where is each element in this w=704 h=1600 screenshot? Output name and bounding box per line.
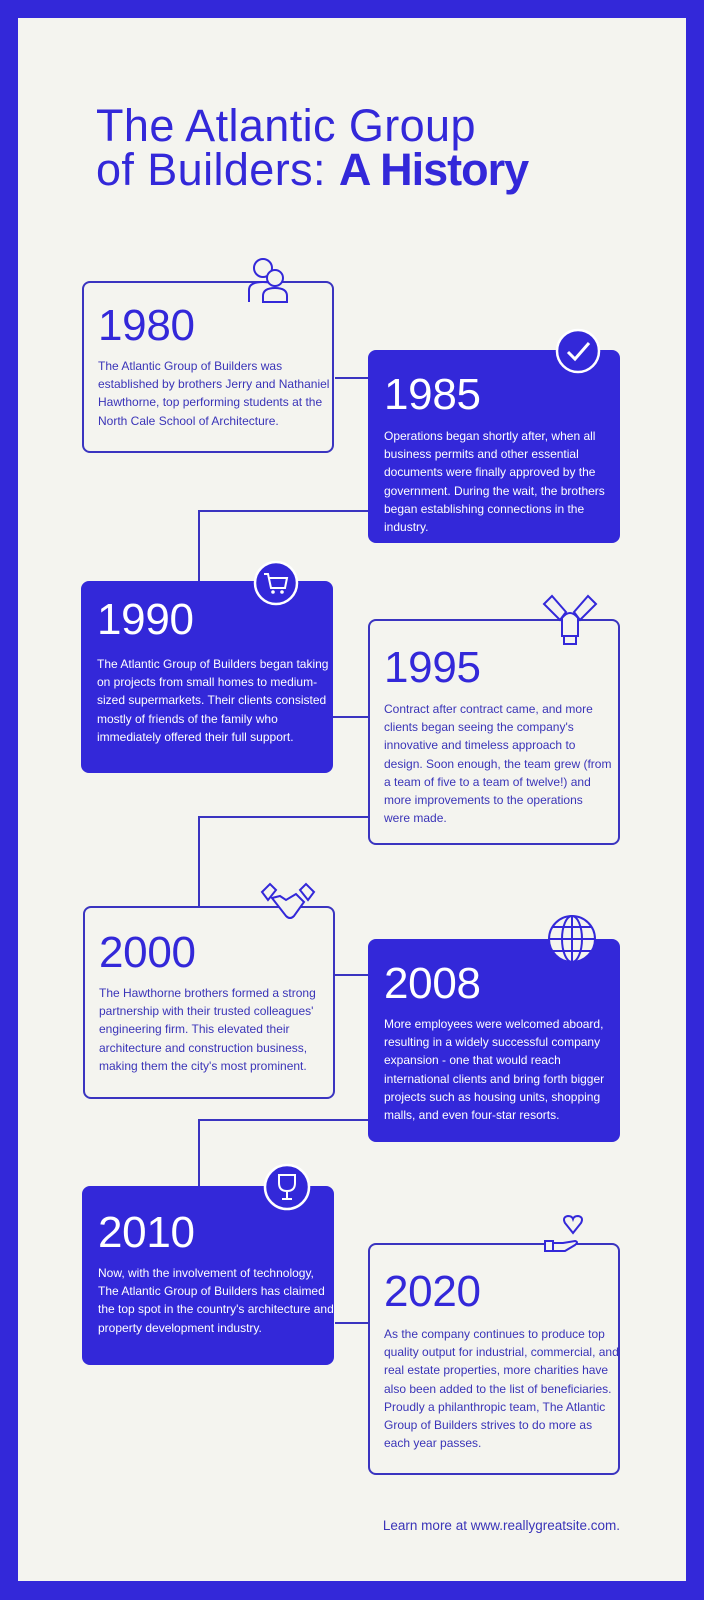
title (96, 100, 529, 195)
card 1985: Operations began shortly after, when all business permits and other essential documents were finally approved by the government. During the wait, the brothers began establishing connections in the industry. (384, 429, 605, 534)
icon: hands (542, 594, 598, 645)
title: of Builders: A History (96, 144, 528, 195)
card 1980 (82, 281, 334, 453)
card 1985: 1985 (384, 370, 481, 419)
card 1980: 1980 (98, 301, 195, 350)
card 2020: 2020 (384, 1267, 481, 1316)
card 2000: 2000 (99, 928, 196, 977)
card 2000: The Hawthorne brothers formed a strong partnership with their trusted colleagues' engineering firm. This elevated their architecture and construction business, making them the city's most prominent. (99, 986, 316, 1073)
card 1995 (368, 619, 620, 845)
card 2000 (83, 906, 335, 1099)
icon: trophy (264, 1164, 310, 1210)
card 1990: The Atlantic Group of Builders began taking on projects from small homes to medium-sized supermarkets. Their clients consisted mostly of friends of the family who immediately offered their full support. (97, 657, 328, 744)
title: The Atlantic Group (96, 100, 476, 151)
icon: check (556, 329, 600, 374)
icon: handshake (260, 882, 316, 919)
card 2008 (368, 939, 620, 1142)
card 2010: Now, with the involvement of technology, The Atlantic Group of Builders has claimed the top spot in the country's architecture and property development industry. (98, 1266, 334, 1335)
icon: heart in hand (544, 1215, 583, 1252)
card 2020: As the company continues to produce top quality output for industrial, commercial, and real estate properties, more charities have also been added to the list of beneficiaries. Proudly a philanthropic team, The Atlantic Group of Builders strives to do more as each year passes. (384, 1327, 619, 1450)
icon: cart (254, 561, 298, 606)
card 1990 (81, 581, 333, 773)
card 1985 (368, 350, 620, 543)
card 1980: The Atlantic Group of Builders was established by brothers Jerry and Nathaniel Hawthorne, top performing students at the North Cale School of Architecture. (98, 359, 329, 428)
card 2020 (368, 1243, 620, 1475)
card 2010: 2010 (98, 1208, 195, 1257)
card 1995: 1995 (384, 643, 481, 692)
card 1990: 1990 (97, 595, 194, 644)
card 2010 (82, 1186, 334, 1365)
card 1995: Contract after contract came, and more clients began seeing the company's innovative and timeless approach to design. Soon enough, the team grew (from a team of five to a team of twelve!) and more improvements to the operations were made. (384, 702, 611, 825)
icon: people (248, 258, 288, 303)
footer: Learn more at www.reallygreatsite.com. (383, 1518, 620, 1533)
card 2008: 2008 (384, 959, 481, 1008)
icon: globe (548, 915, 596, 961)
card 2008: More employees were welcomed aboard, resulting in a widely successful company expansion - one that would reach international clients and bring forth bigger projects such as housing units, shopping malls, and even four-star resorts. (384, 1017, 604, 1122)
